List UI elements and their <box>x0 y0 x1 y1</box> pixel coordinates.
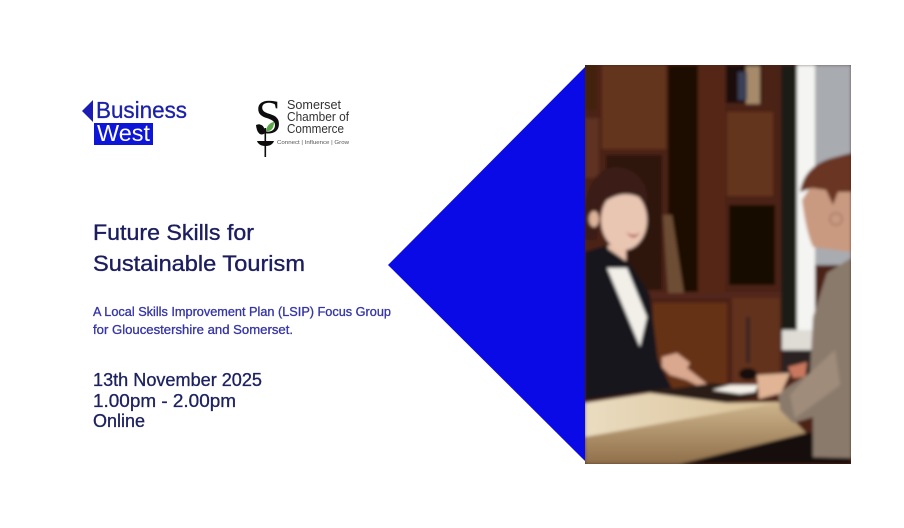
subtitle: A Local Skills Improvement Plan (LSIP) Focus Group <box>93 305 391 319</box>
wood back wall <box>580 60 856 470</box>
logo text: Somerset Chamber of Commerce: Chamber of <box>287 109 349 124</box>
event details: 1.00pm - 2.00pm <box>93 391 236 411</box>
title <box>93 220 305 276</box>
photo: hotel reception desk <box>580 60 856 470</box>
customer <box>757 153 851 458</box>
receptionist <box>585 167 672 400</box>
subtitle: for Gloucestershire and Somerset. <box>93 323 293 337</box>
logo: Business West <box>82 97 187 146</box>
logo wordmark: West: West <box>97 120 151 146</box>
icon: Business West arrow <box>82 100 93 122</box>
subtitle <box>93 305 391 337</box>
title: Future Skills for <box>93 220 254 245</box>
logo tagline: Connect | Influence | Grow <box>277 140 349 146</box>
receptionist hand <box>662 353 712 391</box>
logo: Somerset Chamber of Commerce <box>255 89 349 157</box>
desk bell stand <box>739 317 757 380</box>
logo text: Somerset Chamber of Commerce: Somerset <box>287 97 341 112</box>
title: Sustainable Tourism <box>93 251 305 276</box>
marble counter <box>585 393 851 464</box>
event details <box>93 370 262 431</box>
icon: Somerset S and plant: S <box>255 89 282 144</box>
logo text: Somerset Chamber of Commerce: Commerce <box>287 121 344 136</box>
logo text: Somerset Chamber of Commerce <box>287 97 349 136</box>
background window and curtain <box>781 65 851 375</box>
event details: 13th November 2025 <box>93 370 262 390</box>
event details: Online <box>93 411 145 431</box>
blue triangle <box>388 67 585 461</box>
logo wordmark: Business: Business <box>96 97 187 123</box>
tablet and paper <box>647 383 758 402</box>
